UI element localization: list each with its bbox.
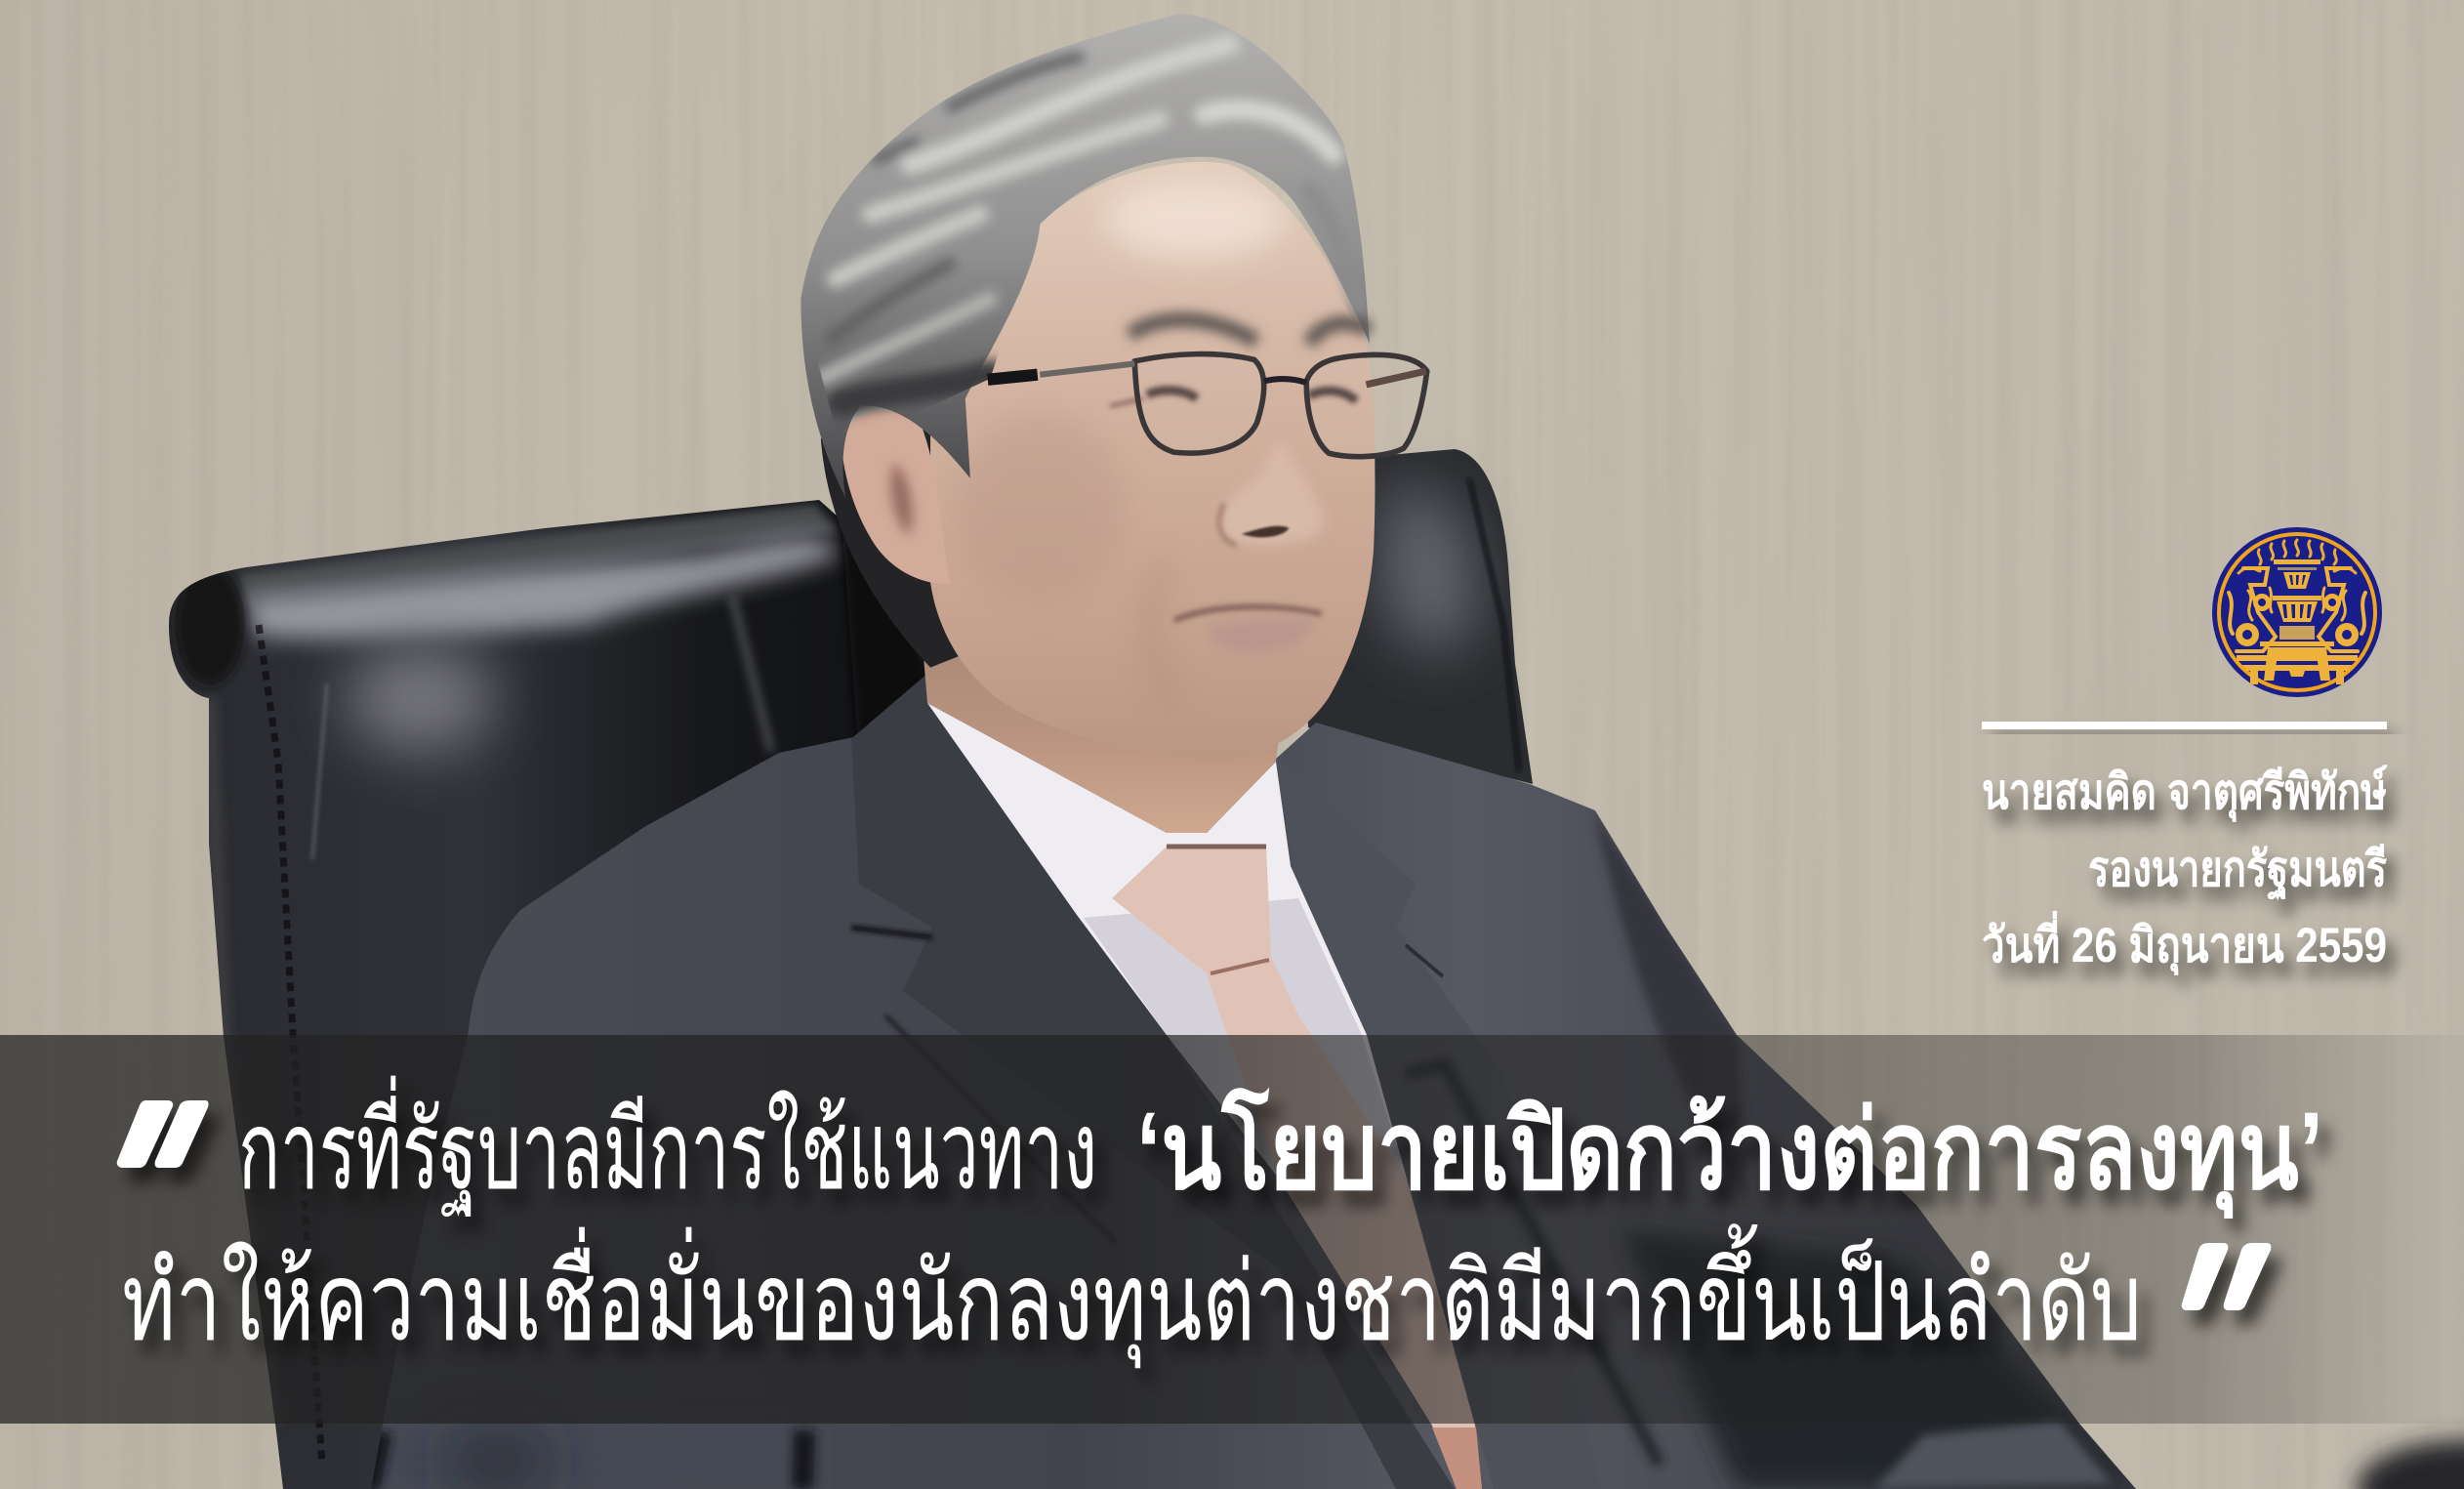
photo: black leather chair bbox=[169, 449, 1533, 1489]
closing quote mark bbox=[2182, 1243, 2271, 1310]
shirt collar and front bbox=[927, 703, 1407, 1179]
seal disc bbox=[2212, 527, 2382, 697]
chair back right of head bbox=[1298, 449, 1533, 784]
date: วันที่ 26 มิถุนายน 2559 bbox=[1982, 911, 2387, 975]
face bbox=[930, 162, 1376, 759]
translucent quote band bbox=[0, 1035, 2464, 1424]
pink tie bbox=[1112, 847, 1482, 1489]
opening quote mark bbox=[117, 1100, 209, 1168]
nose bbox=[1220, 438, 1323, 545]
glasses bbox=[988, 354, 1427, 457]
eyebrows bbox=[1129, 320, 1370, 344]
hair bbox=[801, 14, 1370, 498]
seal urn bbox=[2260, 559, 2334, 646]
speaker position: รองนายกรัฐมนตรี bbox=[2088, 842, 2387, 900]
speaker credit block bbox=[1982, 765, 2388, 975]
head and face bbox=[801, 14, 1427, 759]
seal lions bbox=[2229, 568, 2365, 651]
forehead highlight bbox=[1105, 180, 1284, 259]
lips bbox=[1174, 607, 1322, 620]
photo: man in grey suit with pink tie bbox=[351, 14, 2136, 1489]
cheek shading bbox=[956, 413, 1125, 602]
neck bbox=[918, 586, 1298, 833]
quote line 1 regular: การที่รัฐบาลมีการใช้แนวทาง bbox=[238, 1075, 1097, 1218]
seal pedestal bbox=[2237, 647, 2358, 684]
divider rule above name bbox=[1982, 722, 2387, 729]
ear bbox=[841, 411, 950, 584]
government seal emblem bbox=[2212, 527, 2382, 697]
suit jacket bbox=[351, 674, 2136, 1489]
eyes bbox=[1147, 391, 1356, 401]
quotation text bbox=[117, 1075, 2323, 1369]
dark hair behind ear bbox=[821, 398, 980, 668]
seal flames bbox=[2238, 540, 2356, 573]
chair back left of head bbox=[169, 488, 937, 1489]
